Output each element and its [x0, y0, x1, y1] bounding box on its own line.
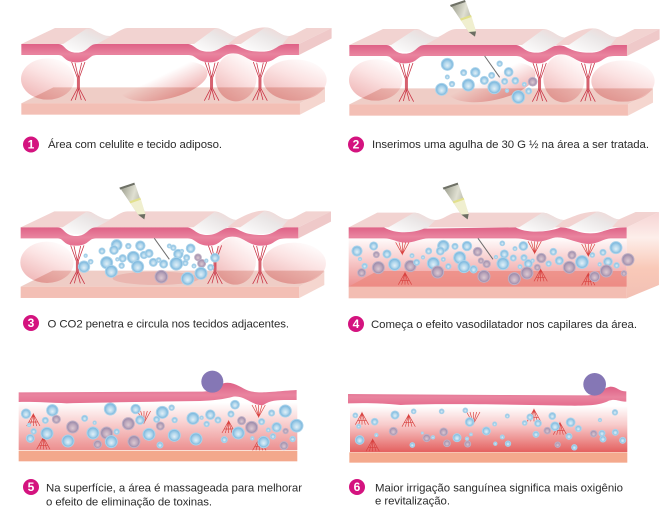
massage ball	[583, 373, 606, 396]
gas bubbles	[436, 58, 537, 103]
needle	[485, 56, 500, 77]
illustration: CO2 circulating in adjacent tissue	[20, 183, 331, 298]
caption 5: o efeito de eliminação de toxinas.	[46, 496, 212, 508]
badge 5	[23, 479, 39, 495]
illustration: needle inserted with bubbles	[349, 0, 660, 116]
caption 5: Na superfície, a área é massageada para melhorar	[46, 482, 302, 494]
capillaries	[396, 241, 595, 285]
panel 4	[348, 183, 659, 332]
badge 3	[23, 315, 39, 331]
gas bubbles	[21, 400, 303, 450]
badge 6	[349, 479, 365, 495]
badge 1	[23, 136, 39, 152]
gas bubbles	[78, 240, 219, 285]
illustration: surface massage	[19, 371, 303, 461]
capillaries	[355, 409, 567, 451]
gas bubbles	[353, 408, 626, 450]
panel 1	[21, 27, 332, 153]
icon: syringe	[443, 183, 469, 219]
panel 2	[348, 0, 660, 152]
caption 6	[375, 482, 623, 508]
panel 3	[20, 183, 331, 331]
caption 6: Maior irrigação sanguínea significa mais oxigênio	[375, 482, 623, 494]
skin band	[348, 387, 626, 406]
needle	[154, 238, 169, 259]
caption 1: Área com celulite e tecido adiposo.	[48, 138, 222, 151]
caption 2: Inserimos uma agulha de 30 G ½ na área a ser tratada.	[372, 139, 649, 151]
badge 4: 4	[353, 317, 360, 331]
badge 1: 1	[28, 138, 35, 152]
badge 2	[348, 136, 364, 152]
illustration: increased blood irrigation	[348, 373, 627, 463]
illustration: skin with cellulite and fat tissue	[21, 27, 332, 115]
panel 5	[19, 371, 303, 508]
massage ball	[201, 371, 223, 393]
needle	[478, 238, 493, 259]
caption 5	[46, 482, 302, 508]
caption 6: e revitalização.	[375, 496, 450, 508]
gas bubbles	[352, 240, 634, 285]
badge 4	[348, 316, 364, 332]
caption 3: O CO2 penetra e circula nos tecidos adjacentes.	[48, 318, 289, 330]
icon: syringe	[119, 183, 145, 219]
badge 2: 2	[353, 138, 360, 152]
badge 5: 5	[28, 480, 35, 494]
capillaries	[27, 405, 266, 450]
skin band	[19, 383, 297, 405]
icon: syringe	[450, 0, 476, 37]
caption 4: Começa o efeito vasodilatador nos capilares da área.	[371, 319, 637, 331]
badge 6: 6	[354, 480, 361, 494]
panel 6	[348, 373, 627, 508]
badge 3: 3	[28, 316, 35, 330]
illustration: vasodilator effect in capillaries	[349, 183, 659, 298]
